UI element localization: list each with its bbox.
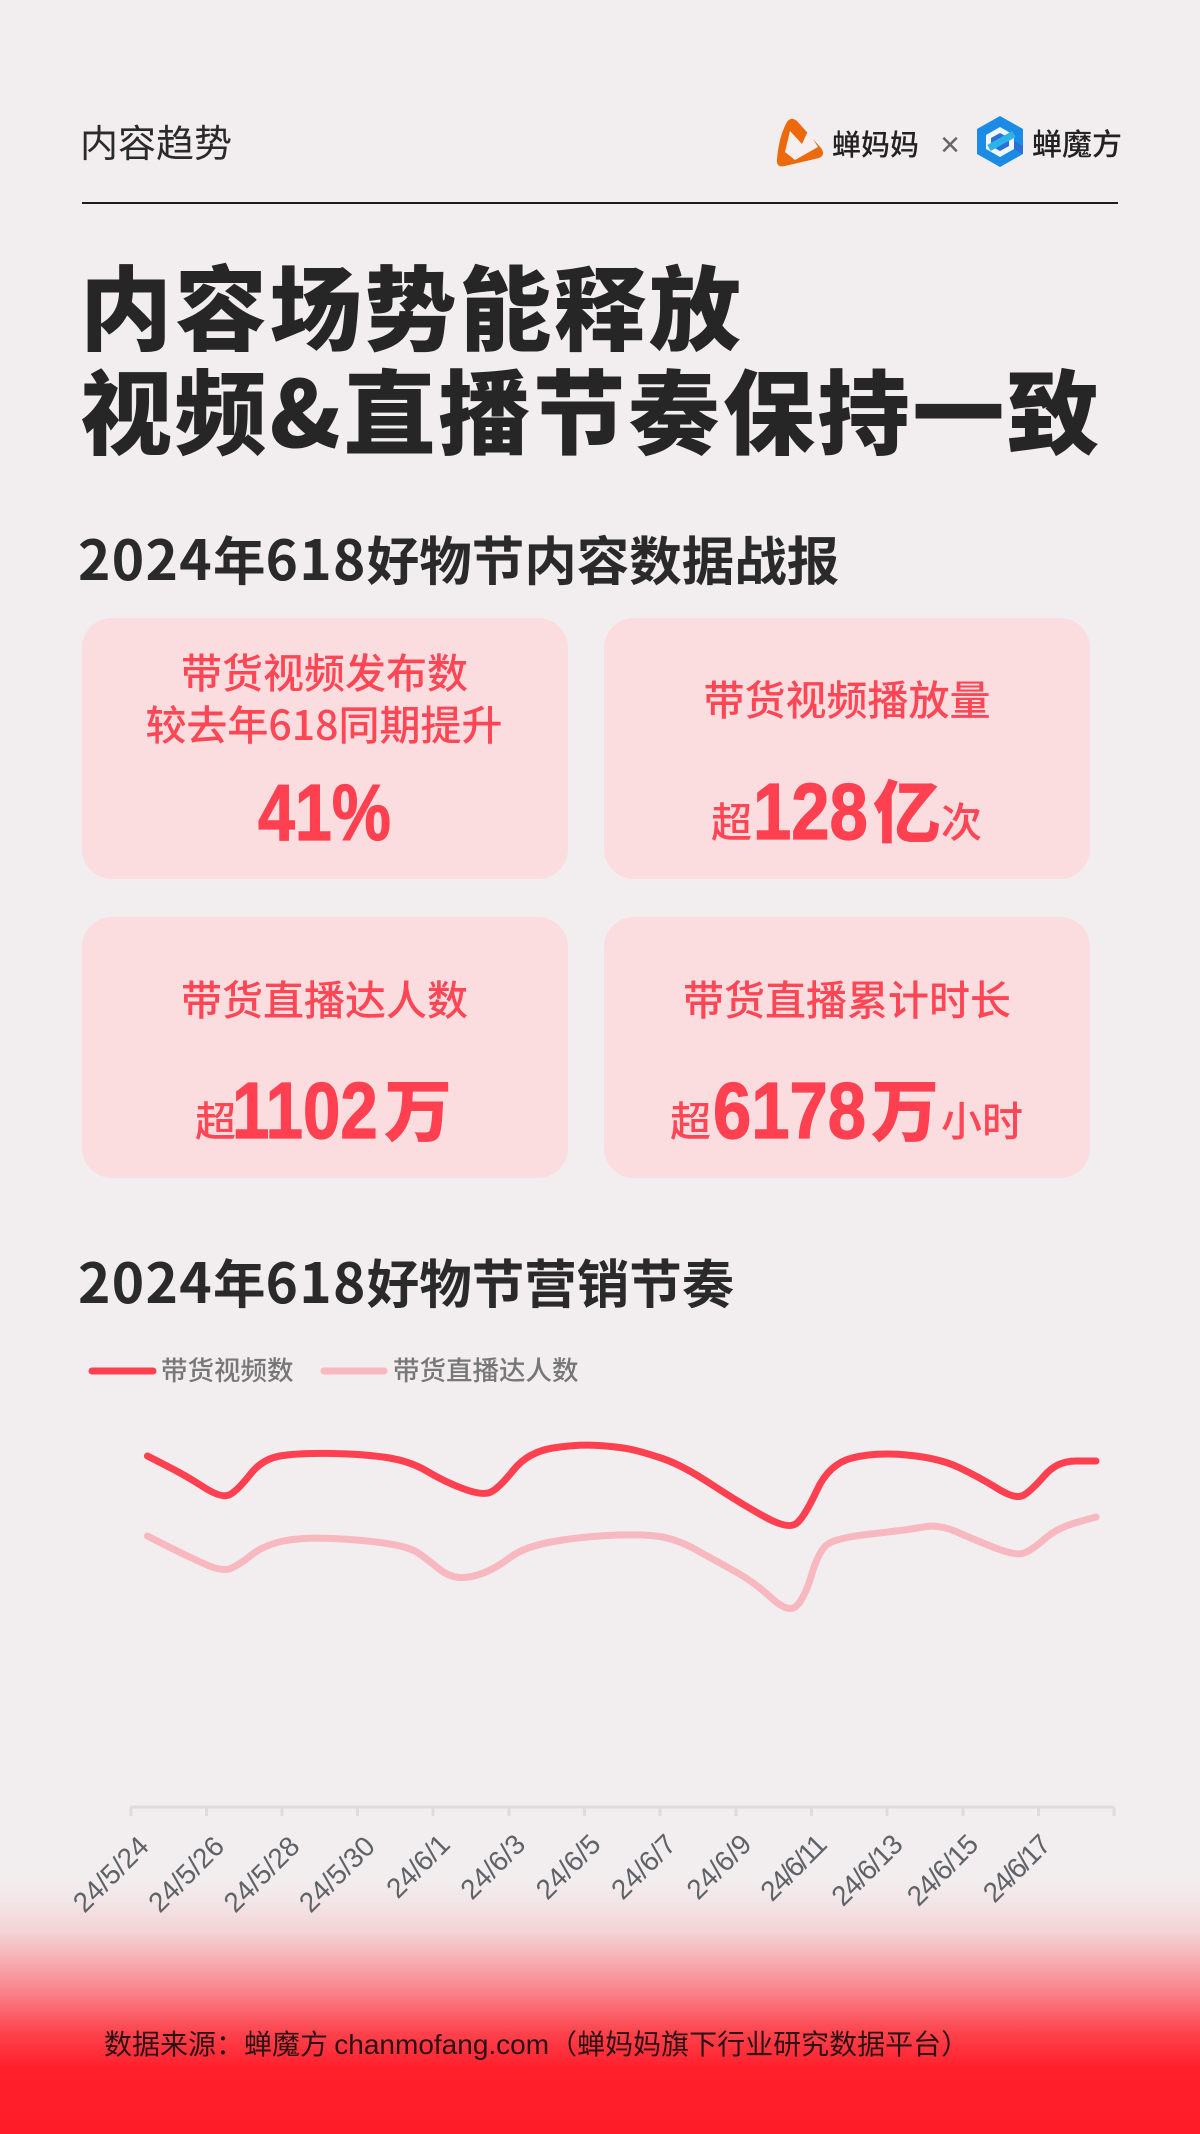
label: live hours: 带货直播累计时长 bbox=[683, 967, 1011, 1027]
section label: 内容趋势 bbox=[80, 113, 232, 168]
label: year over year: 较去年618同期提升 bbox=[145, 692, 503, 752]
value: 41%: 41% bbox=[258, 767, 391, 857]
x axis bbox=[130, 1807, 1114, 1816]
brand name: chanmama: 蝉妈妈 bbox=[832, 122, 919, 164]
x axis labels: 24/6/5 bbox=[530, 1828, 607, 1905]
value: 128亿次: 亿 bbox=[873, 758, 941, 857]
legend: 带货直播达人数 bbox=[393, 1349, 578, 1388]
legend bbox=[92, 1349, 578, 1388]
x axis labels: 24/6/11 bbox=[754, 1828, 833, 1907]
x axis labels: 24/5/26 bbox=[142, 1830, 230, 1918]
x axis labels: 24/6/1 bbox=[380, 1828, 456, 1904]
panel: video count bbox=[82, 618, 568, 879]
icon: chanmama logo bbox=[777, 119, 823, 166]
value: 1102万 bbox=[195, 1057, 452, 1156]
icon: chanmofang logo bbox=[977, 116, 1023, 167]
times sign: × bbox=[940, 126, 960, 164]
value: 1102万: 1102 bbox=[232, 1065, 378, 1155]
brand name: chanmofang: 蝉魔方 bbox=[1032, 120, 1122, 164]
x axis labels: 24/6/15 bbox=[901, 1828, 984, 1912]
value: 128亿次 bbox=[711, 758, 982, 857]
main title: 视频&直播节奏保持一致 bbox=[80, 341, 1102, 474]
x axis labels: 24/5/30 bbox=[293, 1830, 381, 1918]
footer gradient bbox=[0, 1880, 1200, 2134]
value: 128亿次: 次 bbox=[941, 789, 982, 849]
value: 128亿次: 128 bbox=[753, 766, 868, 856]
value: 6178万小时: 万 bbox=[871, 1057, 939, 1156]
main title bbox=[80, 237, 1102, 474]
stat cards bbox=[82, 618, 1090, 1178]
x axis labels: 24/5/24 bbox=[67, 1830, 155, 1918]
logos bbox=[776, 116, 1122, 167]
heading: data report: 2024年618好物节内容数据战报 bbox=[78, 516, 839, 596]
panel: live hours bbox=[604, 917, 1090, 1178]
x axis labels: 24/6/7 bbox=[605, 1828, 682, 1905]
series: live creators bbox=[148, 1517, 1096, 1608]
label: video count: 带货视频发布数 bbox=[181, 640, 468, 700]
label: live creators: 带货直播达人数 bbox=[181, 967, 468, 1027]
value: 6178万小时: 超 bbox=[670, 1088, 711, 1148]
value: 6178万小时: 6178 bbox=[713, 1065, 866, 1155]
panel: live creators bbox=[82, 917, 568, 1178]
value: 6178万小时: 小时 bbox=[941, 1088, 1023, 1148]
panel: video plays bbox=[604, 618, 1090, 879]
source note: 数据来源：蝉魔方 chanmofang.com（蝉妈妈旗下行业研究数据平台） bbox=[104, 2023, 969, 2063]
line chart bbox=[67, 1349, 1116, 1918]
x axis labels: 24/6/17 bbox=[977, 1828, 1057, 1908]
label: video plays: 带货视频播放量 bbox=[704, 667, 990, 727]
series: video count bbox=[148, 1445, 1096, 1526]
x axis labels bbox=[67, 1828, 1057, 1918]
value: 128亿次: 超 bbox=[711, 789, 752, 849]
main title: 内容场势能释放 bbox=[80, 237, 744, 370]
x axis labels: 24/6/13 bbox=[825, 1828, 909, 1912]
legend: 带货视频数 bbox=[161, 1349, 294, 1388]
value: 1102万: 超 bbox=[195, 1088, 236, 1148]
value: 1102万: 万 bbox=[384, 1057, 452, 1156]
x axis labels: 24/6/3 bbox=[454, 1828, 531, 1905]
x axis labels: 24/5/28 bbox=[218, 1830, 306, 1918]
x axis labels: 24/6/9 bbox=[680, 1828, 757, 1905]
value: 6178万小时 bbox=[670, 1057, 1023, 1156]
heading: marketing rhythm: 2024年618好物节营销节奏 bbox=[78, 1239, 734, 1319]
